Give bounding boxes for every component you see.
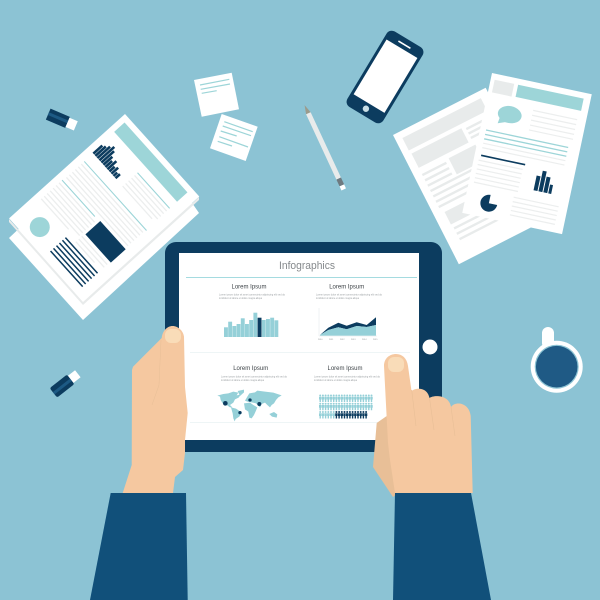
panel: world map [217, 366, 288, 421]
panel: area chart: Lorem ipsum dolor sit amet consectetur adipiscing elit sed do [316, 294, 383, 296]
tablet home button [422, 340, 438, 354]
panel: area chart: 2012 [340, 339, 345, 341]
pencil [302, 104, 346, 191]
panel: bar chart: incididunt ut labore et dolore magna aliqua [219, 297, 263, 300]
tablet [165, 242, 442, 452]
panel: people chart: Lorem ipsum dolor sit amet consectetur adipiscing elit sed do [314, 376, 381, 378]
panel: area chart: 2011 [329, 339, 334, 341]
panel: world map: Lorem Ipsum [233, 366, 268, 372]
panel: bar chart: Lorem Ipsum [231, 284, 267, 290]
thumb behind [373, 416, 398, 497]
panel: area chart: incididunt ut labore et dolore magna aliqua [316, 297, 360, 300]
panel: people chart: Lorem Ipsum [327, 366, 363, 372]
left document stack [9, 114, 199, 320]
panel: world map: Lorem ipsum dolor sit amet consectetur adipiscing elit sed do [221, 376, 288, 378]
smartphone [344, 28, 426, 126]
left hand [123, 326, 188, 493]
right document stack [393, 73, 592, 264]
panel: bar chart: Lorem ipsum dolor sit amet consectetur adipiscing elit sed do [219, 294, 286, 296]
sticky note 1 [194, 73, 239, 117]
coffee cup [531, 327, 583, 393]
sticky note 2 [210, 114, 258, 161]
screen title: Infographics [279, 260, 335, 272]
right hand [373, 354, 473, 497]
panel: area chart: 2014 [362, 339, 367, 341]
fingernail [388, 357, 404, 372]
panel: people chart: incididunt ut labore et dolore magna aliqua [314, 379, 358, 382]
right sleeve [393, 493, 491, 600]
panel: bar chart [219, 284, 286, 337]
panel: area chart: 2010 [318, 339, 323, 341]
thumbnail left [165, 329, 181, 343]
panel: people chart [314, 366, 381, 418]
panel: area chart: Lorem Ipsum [329, 284, 364, 290]
usb stick bottom [50, 369, 82, 398]
front page [462, 73, 592, 234]
panel: area chart: 2015 [373, 339, 378, 341]
tablet screen [179, 253, 419, 440]
back page [393, 88, 551, 264]
panel: area chart: 2013 [351, 339, 356, 341]
left sleeve [90, 493, 188, 600]
panel: area chart [316, 284, 383, 341]
usb stick top [46, 109, 78, 131]
panel: world map: incididunt ut labore et dolore magna aliqua [221, 379, 265, 382]
